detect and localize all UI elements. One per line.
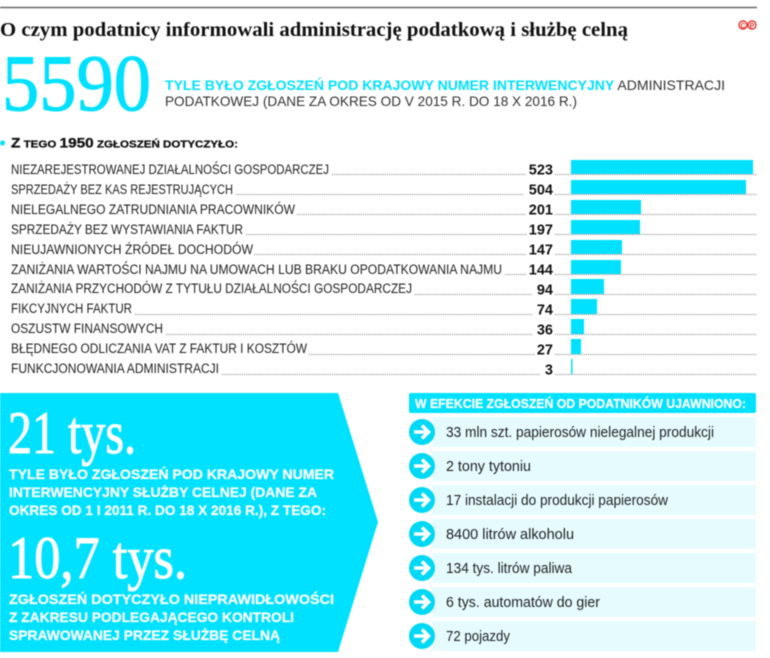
- item: instalacje: 17 instalacji do produkcji papierosów: [446, 493, 668, 509]
- item: pojazdy: 72 pojazdy: [446, 629, 511, 645]
- text: nieprawidłowości: Z ZAKRESU PODLEGAJĄCEGO KONTROLI: [9, 609, 294, 625]
- row: zaniżanie najmu: 144: [529, 262, 553, 278]
- row: oszustwa finansowe: [11, 319, 757, 338]
- row: sprzedaż bez faktur: [11, 220, 757, 238]
- row: nielegalne zatrudnianie: NIELEGALNEGO ZATRUDNIANIA PRACOWNIKÓW: [11, 202, 295, 217]
- row: funkcjonowanie administracji: FUNKCJONOWANIA ADMINISTRACJI: [11, 361, 219, 376]
- row: sprzedaż bez faktur: 197: [529, 222, 553, 238]
- item: papierosy: [409, 417, 756, 447]
- row: zaniżanie przychodów: ZANIŻANIA PRZYCHODÓW Z TYTUŁU DZIAŁALNOŚCI GOSPODARCZEJ: [11, 281, 412, 296]
- text: zgłoszenia do służby celnej: OKRES OD 1 I 2011 R. DO 18 X 2016 R.), Z TEGO:: [9, 502, 326, 518]
- subheading: Z TEGO 1950 ZGŁOSZEŃ DOTYCZYŁO:: [11, 134, 238, 150]
- row: niezarejestrowana działalność: 523: [529, 162, 553, 178]
- row: błędne odliczanie VAT: [11, 339, 757, 358]
- row: błędne odliczanie VAT: BŁĘDNEGO ODLICZANIA VAT Z FAKTUR I KOSZTÓW: [11, 341, 307, 356]
- row: fikcyjne faktury: 74: [537, 302, 553, 318]
- row: nieujawnione źródła: [11, 240, 757, 258]
- row: fikcyjne faktury: FIKCYJNYCH FAKTUR: [11, 301, 132, 316]
- panel: służba celna: [0, 393, 378, 652]
- title: O czym podatnicy informowali administrację podatkową i służbę celną: [0, 19, 628, 41]
- row: sprzedaż bez kas: [11, 180, 757, 198]
- item: paliwo: 134 tys. litrów paliwa: [446, 561, 573, 577]
- item: pojazdy: [409, 621, 756, 651]
- row: niezarejestrowana działalność: [11, 160, 757, 178]
- icon: copyright mark: P: [750, 23, 755, 30]
- bar chart: zgłoszenia: [11, 160, 757, 378]
- row: sprzedaż bez faktur: SPRZEDAŻY BEZ WYSTAWIANIA FAKTUR: [11, 222, 243, 237]
- text: zgłoszenia do służby celnej: TYLE BYŁO ZGŁOSZEŃ POD KRAJOWY NUMER: [9, 466, 334, 482]
- row: funkcjonowanie administracji: 3: [545, 362, 553, 378]
- row: sprzedaż bez kas: 504: [529, 182, 553, 198]
- row: zaniżanie najmu: ZANIŻANIA WARTOŚCI NAJMU NA UMOWACH LUB BRAKU OPODATKOWANIA NAJMU: [11, 262, 502, 277]
- intro text: PODATKOWEJ (DANE ZA OKRES OD V 2015 R. DO 18 X 2016 R.): [165, 93, 577, 109]
- row: funkcjonowanie administracji: [11, 359, 757, 378]
- item: instalacje: [409, 485, 756, 515]
- item: tytoń: 2 tony tytoniu: [446, 459, 531, 475]
- icon: copyright mark: [739, 21, 756, 30]
- panel: efekty zgłoszeń: [409, 393, 756, 651]
- heading bar: W EFEKCIE ZGŁOSZEŃ OD PODATNIKÓW UJAWNIONO:: [415, 396, 746, 411]
- big number: 10,7 tys.: 10,7 tys.: [8, 525, 187, 591]
- item: automaty: 6 tys. automatów do gier: [446, 595, 600, 611]
- icon: copyright mark: C: [740, 23, 746, 30]
- row: sprzedaż bez kas: SPRZEDAŻY BEZ KAS REJESTRUJĄCYCH: [11, 182, 233, 197]
- item: paliwo: [409, 553, 756, 583]
- big number: 5590: 5590: [2, 40, 151, 128]
- text: nieprawidłowości: SPRAWOWANEJ PRZEZ SŁUŻBĘ CELNĄ: [9, 627, 280, 643]
- row: niezarejestrowana działalność: NIEZAREJESTROWANEJ DZIAŁALNOŚCI GOSPODARCZEJ: [11, 162, 329, 177]
- row: oszustwa finansowe: OSZUSTW FINANSOWYCH: [11, 321, 163, 336]
- row: zaniżanie przychodów: 94: [537, 282, 553, 298]
- row: nielegalne zatrudnianie: [11, 200, 757, 218]
- item: automaty: [409, 587, 756, 617]
- item: alkohol: 8400 litrów alkoholu: [446, 527, 574, 543]
- big number: 21 tys.: 21 tys.: [8, 400, 136, 466]
- row: oszustwa finansowe: 36: [537, 322, 553, 338]
- text: zgłoszenia do służby celnej: [9, 466, 334, 518]
- intro text: TYLE BYŁO ZGŁOSZEŃ POD KRAJOWY NUMER INTERWENCYJNY ADMINISTRACJI: [165, 77, 725, 93]
- intro text: [165, 77, 725, 109]
- row: nielegalne zatrudnianie: 201: [529, 202, 553, 218]
- text: nieprawidłowości: ZGŁOSZEŃ DOTYCZYŁO NIEPRAWIDŁOWOŚCI: [9, 590, 334, 607]
- row: zaniżanie przychodów: [11, 279, 757, 298]
- item: papierosy: 33 mln szt. papierosów nielegalnej produkcji: [446, 425, 714, 441]
- item: tytoń: [409, 451, 756, 481]
- row: nieujawnione źródła: 147: [529, 242, 553, 258]
- item: alkohol: [409, 519, 756, 549]
- row: fikcyjne faktury: [11, 299, 757, 318]
- text: nieprawidłowości: [9, 590, 334, 643]
- row: zaniżanie najmu: [11, 260, 757, 278]
- row: nieujawnione źródła: NIEUJAWNIONYCH ŹRÓDEŁ DOCHODÓW: [11, 242, 253, 257]
- row: błędne odliczanie VAT: 27: [537, 342, 553, 358]
- text: zgłoszenia do służby celnej: INTERWENCYJNY SŁUŻBY CELNEJ (DANE ZA: [9, 484, 317, 500]
